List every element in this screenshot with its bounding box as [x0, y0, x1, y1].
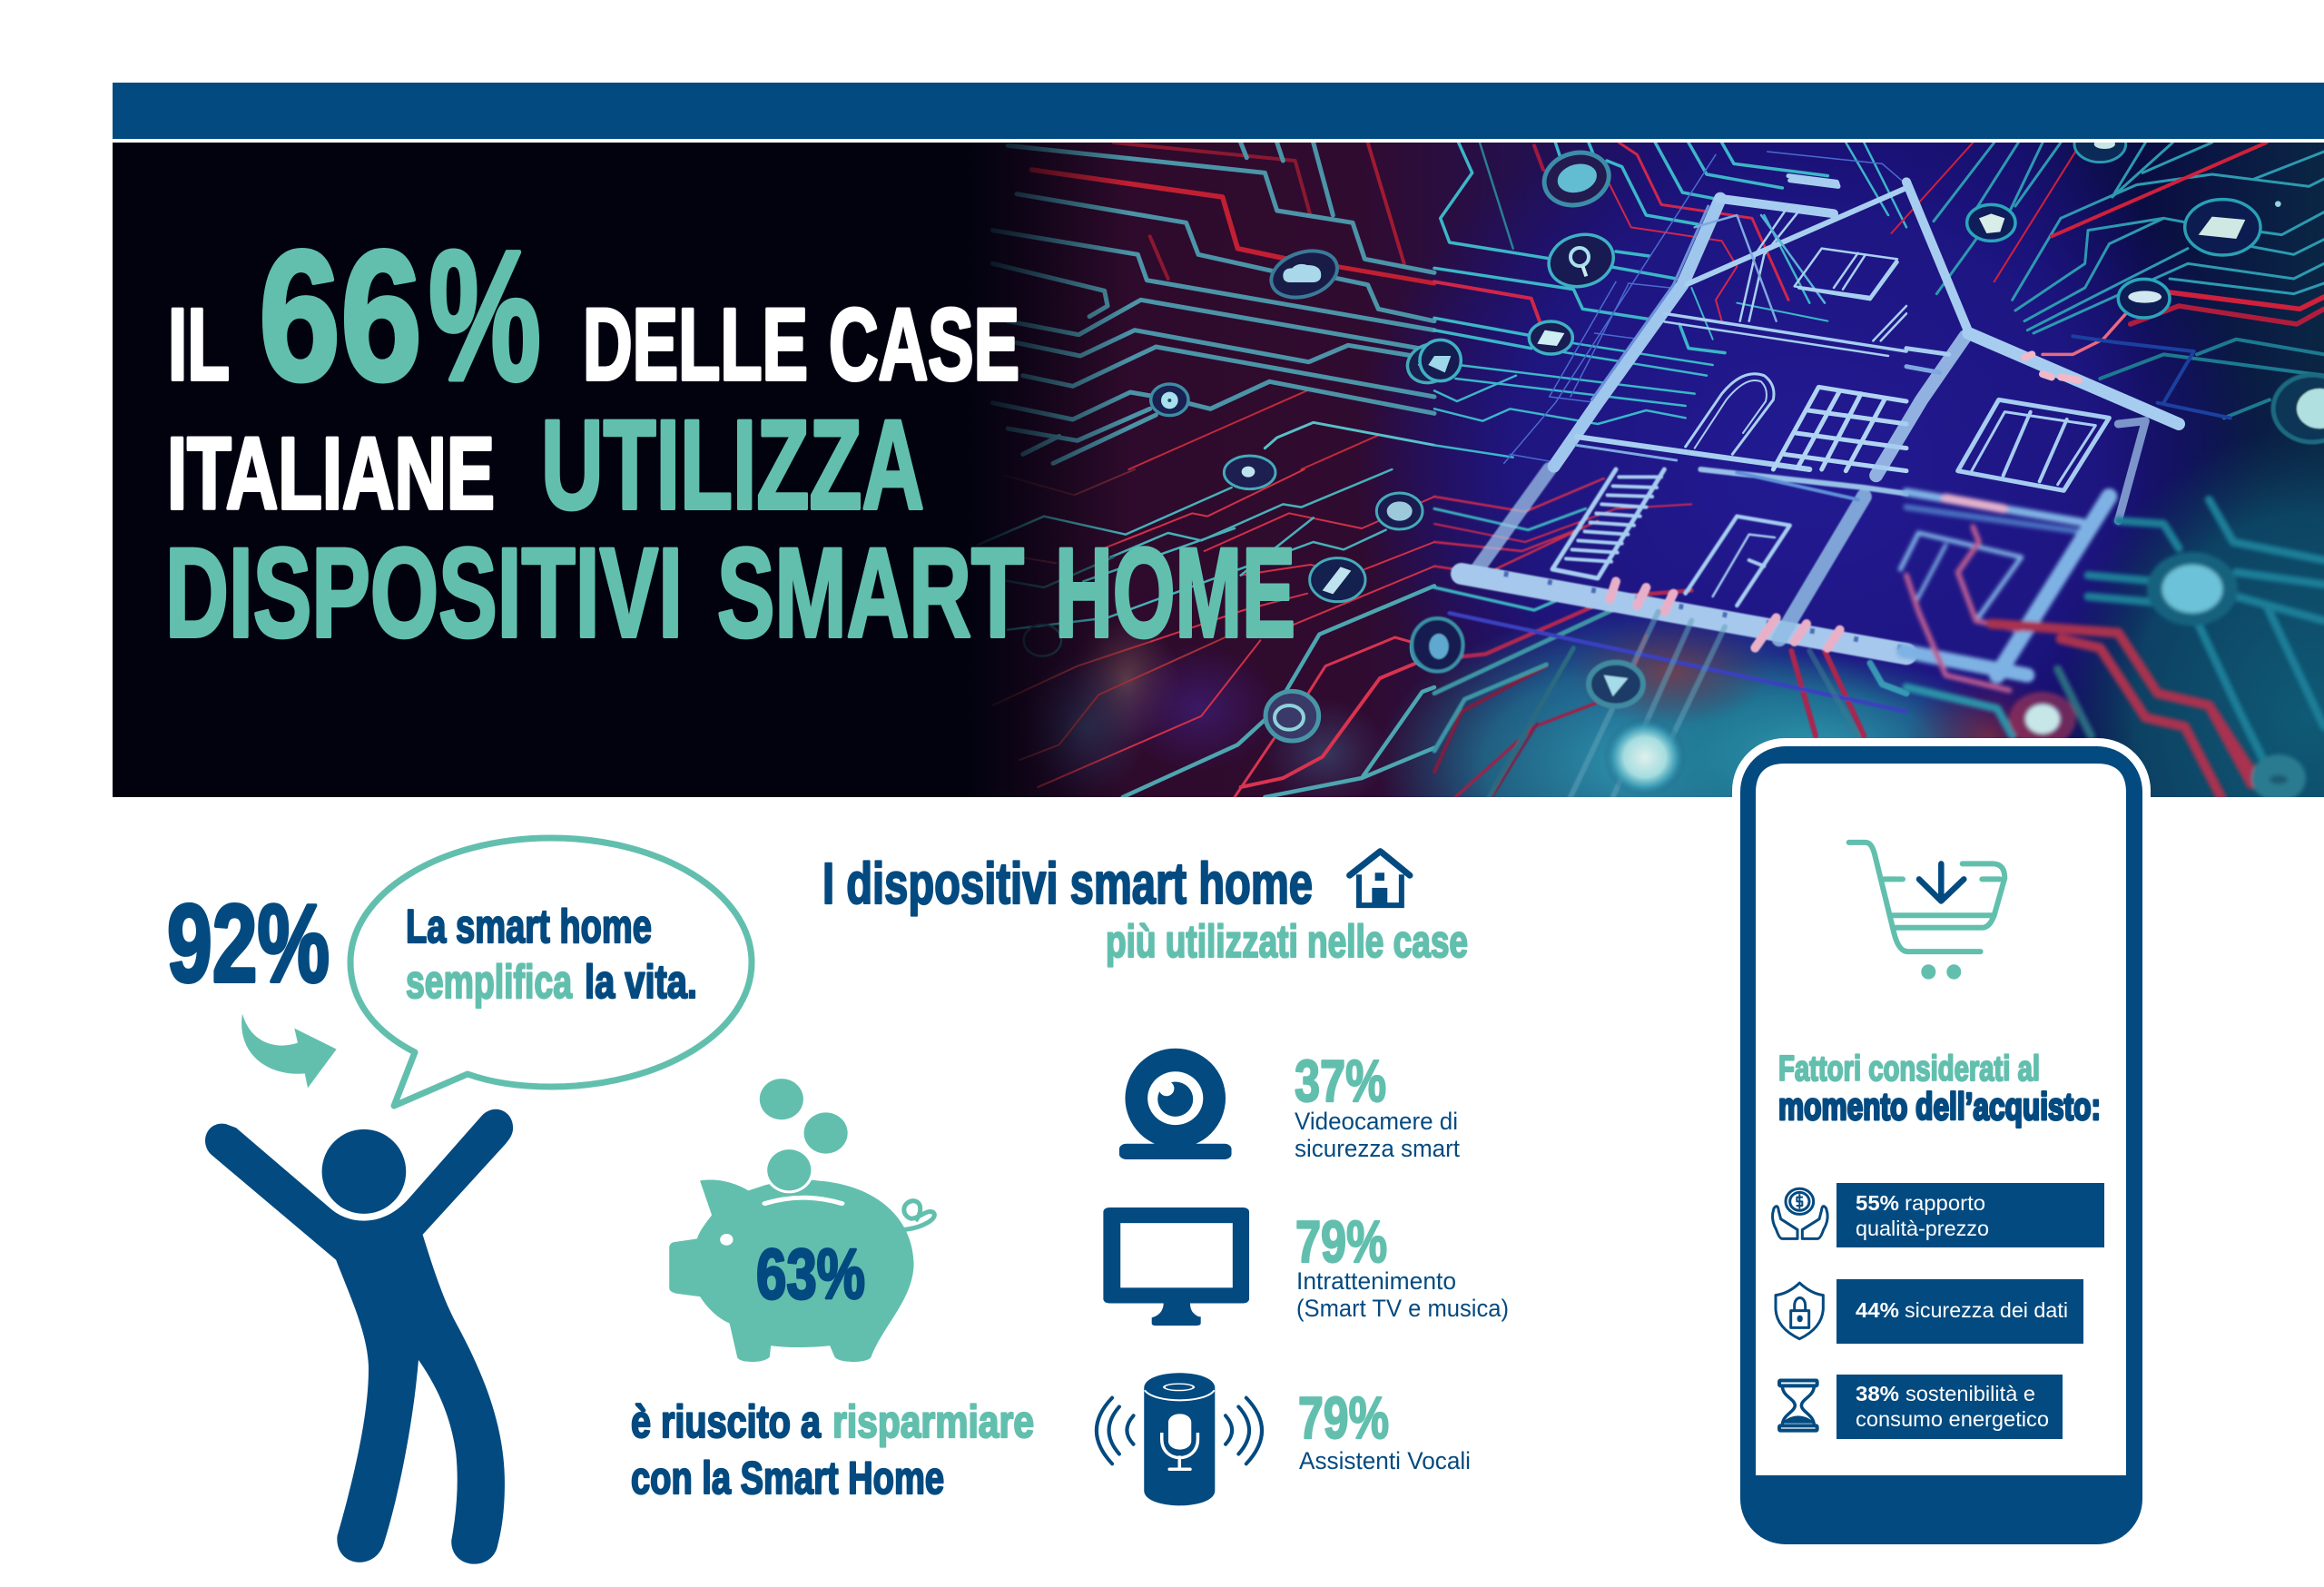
- speech bubble: La smart home: [406, 901, 652, 953]
- hero traces: house upper: [1504, 152, 1906, 471]
- saving caption: [631, 1396, 1034, 1503]
- saving caption: è riuscito a: [631, 1396, 822, 1447]
- phone panel: purchase factors: [1732, 738, 2151, 1554]
- stat: webcam: sicurezza smart: [1295, 1135, 1460, 1162]
- title line 3: SMART: [717, 521, 1024, 664]
- title line 3: DISPOSITIVI: [165, 521, 683, 664]
- title line 3: HOME: [1055, 521, 1295, 664]
- title line 1: [168, 212, 1019, 419]
- title line 2: [167, 393, 924, 536]
- factor: sustainability: sostenibilità e: [1905, 1382, 2035, 1405]
- saving caption: risparmiare: [832, 1396, 1034, 1447]
- device: webcam: [1119, 1049, 1232, 1159]
- devices heading: più utilizzati nelle case: [1106, 916, 1468, 967]
- speech bubble: [350, 838, 752, 1106]
- stat: TV: 79%: [1295, 1208, 1387, 1275]
- piggy stat: 63%: [756, 1234, 865, 1314]
- speech bubble: la vita.: [585, 956, 697, 1009]
- devices heading: I dispositivi smart home: [822, 851, 1313, 916]
- stat: TV: [1295, 1208, 1509, 1322]
- stat: webcam: Videocamere di: [1295, 1108, 1458, 1135]
- title line 1: 66: [259, 212, 422, 419]
- left wall lower end: [1468, 469, 1550, 578]
- factor: data security: 44%: [1856, 1298, 1899, 1322]
- phone heading: Fattori considerati al: [1778, 1050, 2040, 1089]
- hero image: smart home circuit board: [113, 143, 2324, 797]
- staircase: [1552, 469, 1664, 578]
- icon: shopping cart: [1849, 843, 2004, 980]
- hero traces: centre upper: [1420, 143, 1906, 458]
- hero traces: right upper: [1876, 126, 2324, 521]
- icon: cheering person: [205, 1109, 513, 1564]
- hero node: right glowing: [2273, 375, 2324, 442]
- hero left dark fade: [944, 143, 1130, 797]
- factor: value for money: 55%: [1856, 1191, 1899, 1215]
- saving caption: con la Smart Home: [631, 1453, 944, 1503]
- factor: sustainability: 38%: [1856, 1382, 1899, 1405]
- inner wall lower: [1779, 497, 1864, 639]
- stat: TV: (Smart TV e musica): [1296, 1295, 1509, 1322]
- devices heading: [822, 851, 1468, 967]
- device: voice assistant speaker: [1097, 1373, 1262, 1505]
- phone heading: momento dell’acquisto:: [1778, 1085, 2101, 1128]
- speech bubble: semplifica: [406, 956, 573, 1009]
- stat: voice assistants: [1298, 1385, 1471, 1474]
- factor: value for money: qualità-prezzo: [1856, 1217, 1989, 1240]
- stat: voice assistants: Assistenti Vocali: [1299, 1447, 1471, 1474]
- stat: webcam: 37%: [1295, 1048, 1386, 1114]
- title line 1: IL: [168, 288, 230, 401]
- hero traces: centre lower: [1412, 469, 1906, 797]
- factor: data security: [1776, 1279, 2083, 1344]
- title line 3: [165, 521, 1295, 664]
- title line 1: %: [428, 212, 541, 419]
- title line 1: CASE: [829, 288, 1019, 401]
- title line 2: ITALIANE: [167, 417, 495, 530]
- lower door: [1686, 517, 1790, 606]
- factor: sustainability: consumo energetico: [1856, 1407, 2049, 1431]
- icon: piggy bank with coins: [669, 1079, 934, 1362]
- icon: curved arrow: [241, 1014, 337, 1088]
- factor: value for money: [1772, 1183, 2104, 1247]
- hero traces: left lower: [978, 456, 1443, 797]
- hero traces: right lower: [1900, 492, 2324, 802]
- factor: value for money: rapporto: [1905, 1191, 1985, 1215]
- device: TV: [1103, 1208, 1249, 1326]
- title line 1: DELLE: [583, 288, 808, 401]
- grid window: [1773, 387, 1906, 471]
- hero traces: left upper: [992, 143, 1458, 469]
- stat: 92%: 92%: [167, 882, 330, 1005]
- stat: voice assistants: 79%: [1298, 1385, 1389, 1451]
- factor: sustainability: [1779, 1375, 2063, 1439]
- phone heading: [1778, 1050, 2101, 1128]
- factor: data security: sicurezza dei dati: [1905, 1298, 2068, 1322]
- title: [165, 212, 1295, 664]
- stat: webcam: [1295, 1048, 1460, 1162]
- hero bottom glowing node: [1611, 720, 1679, 790]
- ground beam: [1462, 574, 1906, 654]
- top blue bar: [113, 83, 2324, 139]
- arched doorway: [1686, 374, 1774, 454]
- icon: house: [1350, 852, 1410, 905]
- ghost lines: [1571, 612, 1858, 797]
- title line 2: UTILIZZA: [541, 393, 924, 536]
- stat: TV: Intrattenimento: [1296, 1267, 1456, 1295]
